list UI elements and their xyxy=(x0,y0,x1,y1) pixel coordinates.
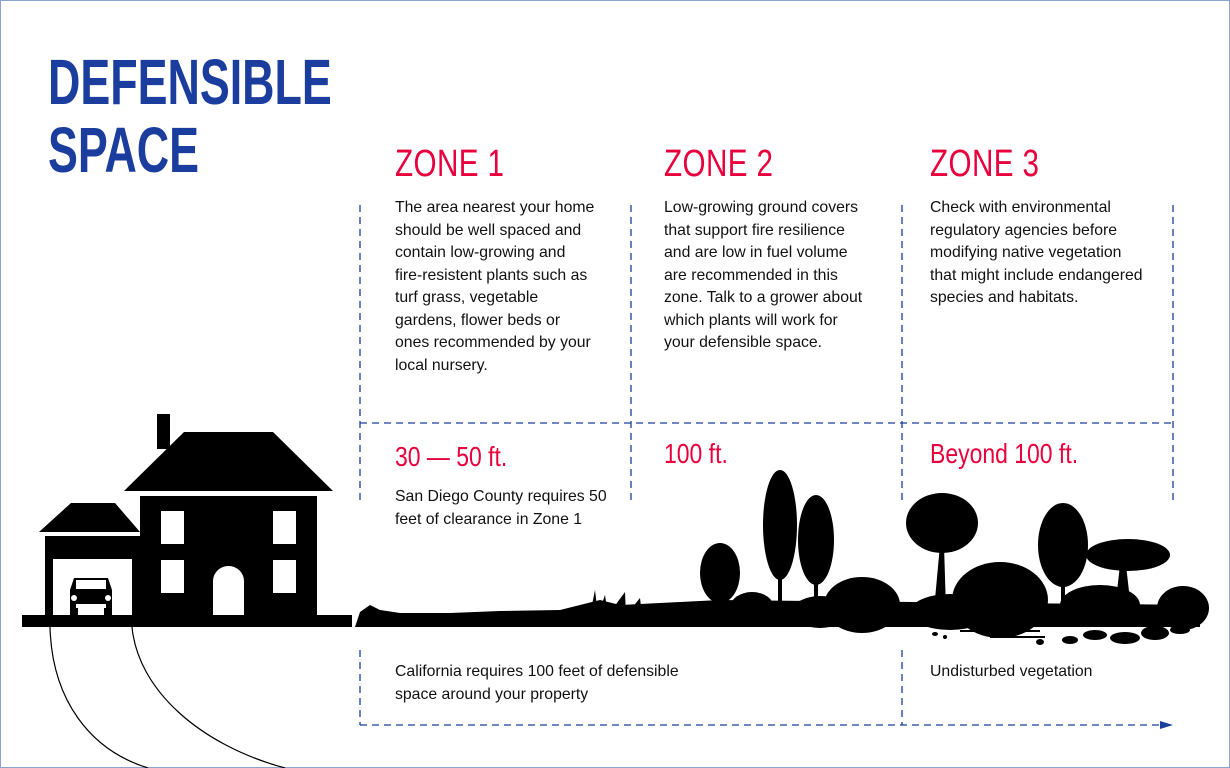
vegetation xyxy=(355,470,1209,645)
zone 1 text: turf grass, vegetable xyxy=(395,289,538,306)
california note: space around your property xyxy=(395,686,588,702)
icon: house xyxy=(22,414,352,627)
distance zone 2: 100 ft. xyxy=(664,438,728,469)
zone 2 heading: ZONE 2 xyxy=(664,143,773,185)
distance zone 1: 30 — 50 ft. xyxy=(395,441,507,472)
zone 1 text: contain low-growing and xyxy=(395,244,565,261)
zone 3 text: regulatory agencies before xyxy=(930,222,1117,238)
zone 1 text: fire-resistent plants such as xyxy=(395,266,587,284)
distance zone 3: Beyond 100 ft. xyxy=(930,438,1078,469)
zone 2 text: your defensible space. xyxy=(664,334,822,351)
zone 1 text: local nursery. xyxy=(395,356,488,374)
zone 3 text: that might include endangered xyxy=(930,266,1143,284)
zone 1 text: ones recommended by your xyxy=(395,334,591,351)
zone 2 text: are recommended in this xyxy=(664,266,838,284)
zone 3 text: species and habitats. xyxy=(930,289,1078,306)
zone 3 text: Check with environmental xyxy=(930,199,1111,216)
california note: California requires 100 feet of defensible xyxy=(395,663,679,680)
san diego note xyxy=(395,488,607,528)
zone 1 heading: ZONE 1 xyxy=(395,143,504,185)
san diego note: San Diego County requires 50 xyxy=(395,488,607,505)
zone 2 text: that support fire resilience xyxy=(664,222,845,238)
zone 3 text xyxy=(930,199,1143,306)
zone 3 heading: ZONE 3 xyxy=(930,143,1039,185)
zone 1 text: should be well spaced and xyxy=(395,222,581,238)
zone 2 text: Low-growing ground covers xyxy=(664,199,858,216)
zone 2 text: and are low in fuel volume xyxy=(664,244,848,261)
zone 1 text: The area nearest your home xyxy=(395,199,594,216)
zone 3 text: modifying native vegetation xyxy=(930,244,1121,261)
zone 2 text xyxy=(664,199,862,351)
title: SPACE xyxy=(48,114,199,186)
zone 1 text xyxy=(395,199,594,374)
california note xyxy=(395,663,679,702)
zone 1 text: gardens, flower beds or xyxy=(395,312,560,328)
undisturbed note: Undisturbed vegetation xyxy=(930,663,1092,680)
title xyxy=(48,46,332,186)
zone 2 text: which plants will work for xyxy=(664,312,838,328)
zone 2 text: zone. Talk to a grower about xyxy=(664,289,862,306)
driveway curves xyxy=(50,627,285,768)
title: DEFENSIBLE xyxy=(48,46,332,118)
san diego note: feet of clearance in Zone 1 xyxy=(395,510,582,528)
